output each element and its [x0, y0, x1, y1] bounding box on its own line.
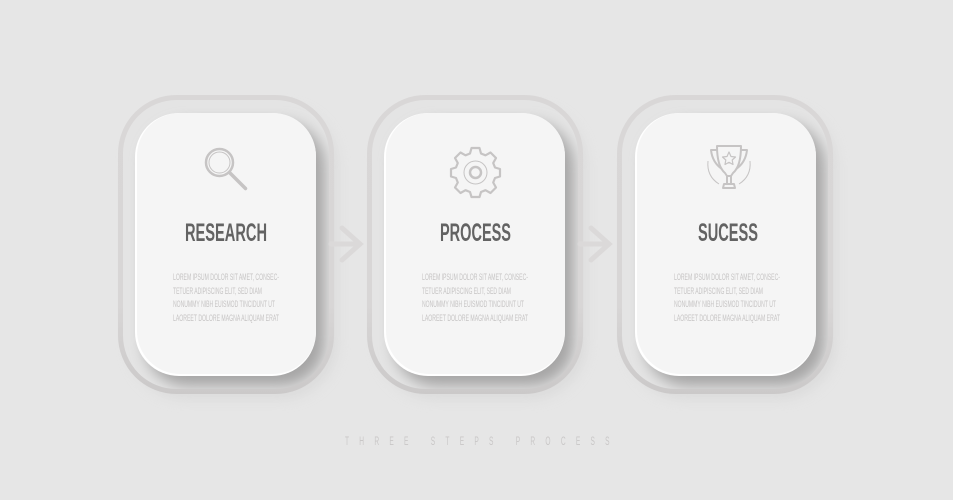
panel: research — [120, 98, 338, 400]
text block: process: LAOREET DOLORE MAGNA ALIQUAM ERAT — [422, 313, 528, 323]
text block: research: LOREM IPSUM DOLOR SIT AMET, CONSEC- — [173, 272, 279, 282]
heading: process: PROCESS — [440, 219, 511, 247]
text block: success: LOREM IPSUM DOLOR SIT AMET, CONSEC- — [674, 272, 780, 282]
text block: success — [674, 272, 780, 323]
text block: research: LAOREET DOLORE MAGNA ALIQUAM ERAT — [173, 313, 279, 323]
text block: research: TETUER ADIPISCING ELIT, SED DIAM — [173, 286, 262, 296]
icon: magnifying glass — [206, 149, 246, 188]
text block: research — [173, 272, 279, 323]
text block: success: TETUER ADIPISCING ELIT, SED DIAM — [674, 286, 763, 296]
heading: success: SUCESS — [698, 219, 758, 247]
panel: process — [370, 98, 587, 400]
text block: success: LAOREET DOLORE MAGNA ALIQUAM ERAT — [674, 313, 780, 323]
heading: research: RESEARCH — [185, 219, 267, 247]
icon: trophy — [708, 146, 750, 188]
text block: process — [422, 272, 528, 323]
text block: research: NONUMMY NIBH EUISMOD TINCIDUNT UT — [173, 299, 275, 309]
footer caption: THREE STEPS PROCESS — [345, 435, 610, 449]
arrow: process to success — [580, 228, 609, 260]
arrow: research to process — [331, 228, 360, 260]
panel: success — [620, 98, 837, 400]
text block: process: LOREM IPSUM DOLOR SIT AMET, CONSEC- — [422, 272, 528, 282]
icon: gear — [451, 148, 500, 197]
text block: process: TETUER ADIPISCING ELIT, SED DIAM — [422, 286, 511, 296]
text block: process: NONUMMY NIBH EUISMOD TINCIDUNT UT — [422, 299, 524, 309]
text block: success: NONUMMY NIBH EUISMOD TINCIDUNT UT — [674, 299, 776, 309]
